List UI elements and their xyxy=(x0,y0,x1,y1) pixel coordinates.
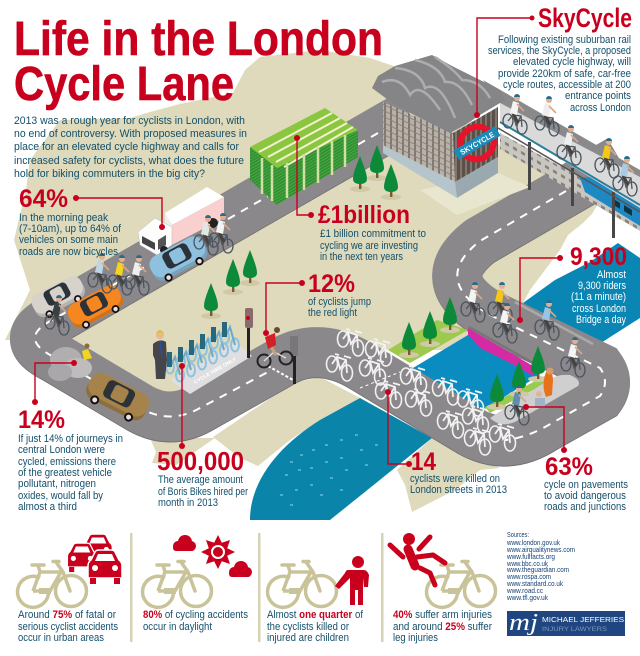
panel: injuries: and around 25% suffer xyxy=(393,621,492,633)
grass verges xyxy=(388,320,552,413)
intro text: hold for biking commuters in the big city? xyxy=(14,168,205,180)
stat text: 40% suffer arm injuries xyxy=(393,609,492,621)
icon: cars and bike xyxy=(18,534,122,607)
divider xyxy=(130,533,132,642)
callout: 64% xyxy=(19,185,165,258)
panel: daylight: occur in daylight xyxy=(143,621,212,633)
intro text xyxy=(14,115,247,180)
road cyclists xyxy=(45,213,585,425)
trees xyxy=(201,145,548,410)
callout: 9,300: (11 a minute) xyxy=(571,291,626,303)
viaduct deck xyxy=(483,80,640,212)
skycycle callout line xyxy=(474,16,534,118)
line: 1 billion xyxy=(294,135,314,218)
water under bridge xyxy=(413,335,540,410)
icon: sun clouds and bike xyxy=(143,535,252,607)
callout: 14 killed: 14 xyxy=(411,448,436,476)
logo: Michael Jefferies: INJURY LAWYERS xyxy=(542,627,607,633)
sources xyxy=(506,530,575,602)
intro text: 2013 was a rough year for cyclists in London, with xyxy=(14,115,245,127)
river xyxy=(250,398,432,520)
building xyxy=(372,55,506,198)
viaduct pillars xyxy=(528,142,615,238)
logo: Michael Jefferies: MICHAEL JEFFERIES xyxy=(542,617,624,624)
callout: 64%: (7-10am), up to 64% of xyxy=(19,223,122,235)
panel: urban areas: serious cyclist accidents xyxy=(18,621,118,633)
sources: www.bbc.co.uk xyxy=(506,559,548,568)
callout: 63%: to avoid dangerous xyxy=(544,490,626,502)
callout: 12%: 12% xyxy=(308,270,355,298)
intro text: increased safety for cyclists, what does the future xyxy=(14,155,244,167)
roundel xyxy=(448,117,506,169)
icon: bike and falling man xyxy=(390,533,496,607)
boris bikes: CYCLE HIRE ONLY xyxy=(193,356,238,386)
icon: bike and child xyxy=(268,556,369,607)
callout: 63%: roads and junctions xyxy=(544,501,626,513)
callout: 64%: 64% xyxy=(19,185,68,213)
train xyxy=(580,177,640,226)
callout: 14%: almost a third xyxy=(18,501,77,513)
road markings xyxy=(35,133,605,440)
callout: 9,300: 9,300 xyxy=(570,243,627,271)
callout: 64%: In the morning peak xyxy=(19,212,108,224)
callout: 12%: of cyclists jump xyxy=(308,296,371,308)
callout: 12%: the red light xyxy=(308,307,357,319)
red light cyclist xyxy=(258,327,292,368)
cars xyxy=(28,233,212,427)
sources: www.road.cc xyxy=(506,586,543,595)
callout: 63% xyxy=(523,404,628,513)
roundel: SKYCYCLE xyxy=(459,130,496,157)
callout: 14%: oxides, would fall by xyxy=(18,490,103,502)
logo: Michael Jefferies xyxy=(507,610,625,636)
sources: www.standard.co.uk xyxy=(506,579,563,588)
title: Life in the London xyxy=(14,13,383,66)
boris bikes xyxy=(166,322,252,394)
callout: 14 killed: London streets in 2013 xyxy=(410,484,507,496)
panel: children xyxy=(267,556,369,644)
stat text: Around 75% of fatal or xyxy=(18,609,116,621)
sources: www.rospa.com xyxy=(506,572,551,581)
callout: 9,300 xyxy=(517,243,627,326)
callout: 14% xyxy=(18,360,123,513)
callout: 64%: vehicles on some main xyxy=(19,234,118,246)
title xyxy=(14,13,383,111)
callout: 1 billion: cycling we are investing xyxy=(320,240,418,252)
road network xyxy=(35,114,620,442)
map: land xyxy=(5,50,600,512)
callout: 1 billion: £1billion xyxy=(318,201,410,229)
divider xyxy=(258,533,260,642)
panel: urban areas xyxy=(18,534,122,644)
sources: www.airqualitynews.com xyxy=(506,545,575,554)
traffic lights xyxy=(245,308,298,384)
sources: Sources: xyxy=(507,530,529,539)
callout: 500,000: of Boris Bikes hired per xyxy=(158,486,248,498)
pavement xyxy=(490,375,579,424)
pedestrians on pavement xyxy=(535,368,554,408)
panel: urban areas: occur in urban areas xyxy=(18,632,104,644)
callout: 14%: If just 14% of journeys in xyxy=(18,433,123,445)
callout: 14%: of the greatest vehicle xyxy=(18,467,112,479)
roof xyxy=(372,55,505,133)
pink bridge xyxy=(468,302,593,376)
logo: Michael Jefferies: mj xyxy=(509,610,538,636)
sources: www.tfl.gov.uk xyxy=(506,593,548,602)
sky cyclists xyxy=(503,94,637,196)
callout: SkyCycle xyxy=(488,3,632,114)
callout: 1 billion: £1 billion commitment to xyxy=(320,228,426,240)
callout: 14%: cycled, emissions there xyxy=(18,456,116,468)
callout: 500,000 xyxy=(157,363,248,509)
panel: daylight xyxy=(143,535,252,633)
callout: 9,300: Almost xyxy=(597,269,626,281)
callout: 64%: roads are now bicycles xyxy=(19,246,118,258)
wall xyxy=(383,102,455,182)
callout: 63%: 63% xyxy=(545,453,593,481)
callout: 14 killed: cyclists were killed on xyxy=(410,473,500,485)
callout: 63%: cycle on pavements xyxy=(544,479,628,491)
callout: 9,300: 9,300 riders xyxy=(578,280,626,292)
callout: 9,300: cross London xyxy=(572,303,626,315)
callout: 14%: central London were xyxy=(18,444,105,456)
stat text: Almost one quarter of xyxy=(267,609,364,621)
panel: children: the cyclists killed or xyxy=(267,621,349,633)
smoke and cyclist xyxy=(48,344,92,381)
sources: www.fullfacts.org xyxy=(506,552,555,561)
water upper right xyxy=(523,243,640,348)
callout: 1 billion xyxy=(318,201,426,263)
intro text: place for an elevated cycle highway and calls for xyxy=(14,141,239,153)
green money block xyxy=(250,108,358,205)
plaza xyxy=(420,173,530,215)
divider xyxy=(381,533,384,642)
panel: children: injured are children xyxy=(267,632,349,644)
callout: 500,000: The average amount xyxy=(158,474,243,486)
callout: 1 billion: in the next ten years xyxy=(320,251,403,263)
panel: injuries xyxy=(390,533,496,644)
sources: www.london.gov.uk xyxy=(506,538,560,547)
panel: injuries: leg injuries xyxy=(393,632,438,644)
callout: 14%: pollutant, nitrogen xyxy=(18,478,96,490)
stat text: 80% of cycling accidents xyxy=(143,609,248,621)
callout: 500,000: 500,000 xyxy=(157,446,244,476)
white bikes xyxy=(326,329,516,455)
callout: SkyCycle: entrance points xyxy=(565,90,631,102)
title: Cycle Lane xyxy=(14,58,234,111)
callout: 14%: 14% xyxy=(18,406,65,434)
man in suit xyxy=(153,330,167,379)
intro text: no end of controversy. With proposed measures in xyxy=(14,128,247,140)
callout: 500,000: month in 2013 xyxy=(158,497,218,509)
sources: www.theguardian.com xyxy=(506,565,569,574)
callout: 12% xyxy=(263,270,371,336)
callout: 14 killed xyxy=(385,389,507,496)
callout: 9,300: Bridge a day xyxy=(576,314,626,326)
lorry xyxy=(138,187,224,255)
railway track xyxy=(500,133,640,231)
